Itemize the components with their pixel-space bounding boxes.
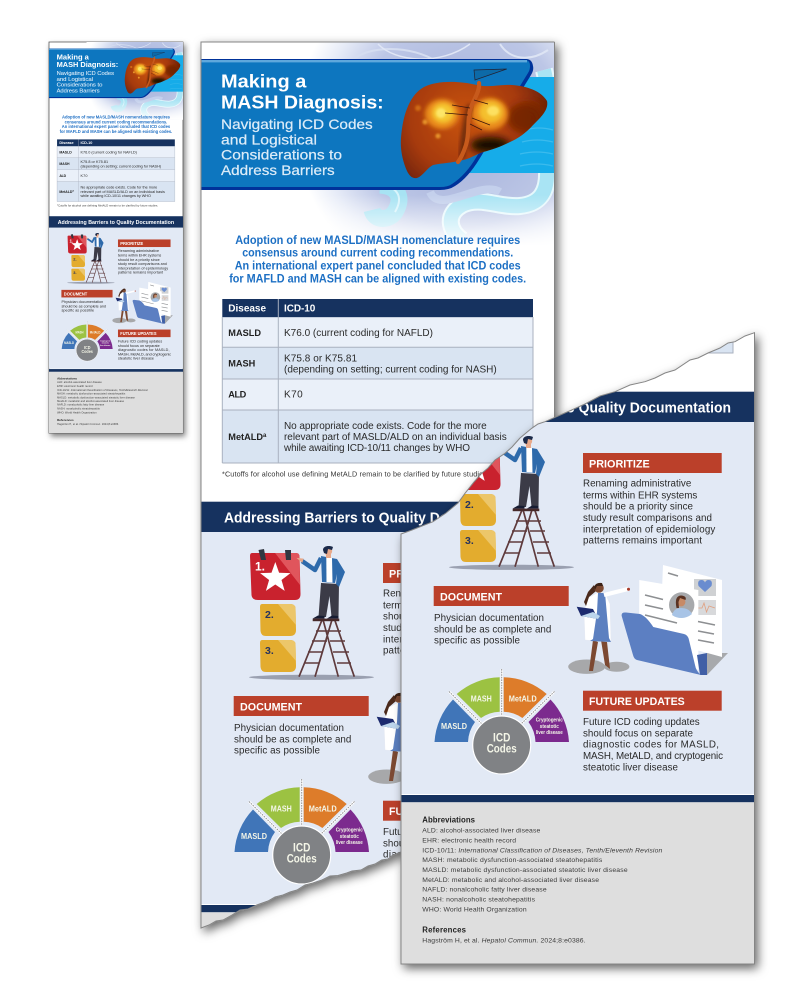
thumbnail infographic: MASLD	[59, 150, 72, 154]
thumbnail infographic: NAFLD: nonalcoholic fatty liver disease	[57, 403, 105, 407]
abbreviations: MetALD: metabolic and alcohol-associated liver disease	[422, 877, 599, 884]
chart: ICD codes wheel: Codes	[487, 744, 517, 756]
chart: ICD codes wheel: Cryptogenic	[336, 828, 363, 834]
thumbnail infographic: study result comparisons and	[118, 262, 167, 266]
thumbnail infographic: ICD	[84, 345, 90, 350]
thumbnail infographic: (depending on setting; current coding for NASH)	[80, 164, 162, 168]
block: document: DOCUMENT	[440, 592, 502, 604]
illustration: doctor and patient folder	[568, 565, 728, 675]
thumbnail infographic: Cryptogenic	[100, 339, 111, 342]
chart: ICD codes wheel: ICD	[293, 843, 310, 855]
thumbnail infographic: Making a	[57, 54, 89, 61]
thumbnail infographic: Renaming administrative	[118, 249, 159, 253]
block: prioritize: patterns remains important	[383, 645, 502, 656]
thumbnail infographic: MASLD: metabolic dysfunction-associated steatotic liver disease	[57, 395, 135, 399]
thumbnail infographic: steatotic liver disease	[118, 357, 154, 361]
block: document: Physician documentation	[434, 613, 544, 624]
block: prioritize: PRIORITIZE	[389, 568, 450, 580]
chart: ICD codes wheel: MASH	[471, 693, 492, 703]
block: future updates	[583, 691, 723, 773]
block: document: Physician documentation	[234, 723, 344, 734]
block: prioritize: Renaming administrative	[583, 479, 692, 490]
thumbnail infographic: MASH	[75, 331, 84, 335]
chart: ICD codes wheel: MetALD	[509, 693, 537, 703]
thumbnail infographic: should focus on separate	[118, 344, 160, 348]
block: prioritize: should be a priority since	[583, 501, 694, 512]
block: future updates: steatotic liver disease	[583, 762, 679, 773]
thumbnail infographic: interpretation of epidemiology	[118, 267, 168, 271]
abbreviations: MASH: metabolic dysfunction-associated steatohepatitis	[422, 857, 603, 864]
chart: ICD codes wheel: Cryptogenic	[536, 718, 563, 724]
section heading band: Addressing Barriers to Quality Documentation	[224, 509, 531, 526]
table: ICD-10 codes: K76.0 (current coding for NAFLD)	[284, 328, 433, 339]
block: future updates: diagnostic codes for MASLD,	[383, 850, 519, 861]
intro text: for MAFLD and MASH can be aligned with existing codes.	[229, 271, 526, 285]
thumbnail infographic: 1.	[69, 238, 73, 243]
block: future updates: should focus on separate	[583, 728, 694, 739]
abbreviations: ICD-10/11: International Classification of Diseases, Tenth/Eleventh Revision	[422, 847, 663, 854]
table footnote: *Cutoffs for alcohol use defining MetALD remain to be clarified by future studies.	[222, 470, 489, 479]
abbreviations: Abbreviations	[422, 816, 476, 825]
illustration: doctor and folder	[368, 692, 400, 784]
thumbnail infographic: K75.8 or K75.81	[80, 160, 108, 164]
illustration: man on ladder with priority list: 2.	[465, 499, 474, 511]
block: document: DOCUMENT	[240, 702, 302, 714]
title: Navigating ICD Codes	[221, 117, 373, 132]
thumbnail infographic: DOCUMENT	[64, 291, 88, 296]
references: References	[422, 925, 467, 934]
illustration: priority list, man on ladder	[249, 546, 374, 680]
table: ICD-10 codes: No appropriate code exists. Code for the more	[284, 421, 487, 432]
thumbnail infographic: No appropriate code exists. Code for the more	[80, 186, 157, 190]
thumbnail infographic: Adoption of new MASLD/MASH nomenclature requires	[62, 115, 170, 120]
thumbnail infographic: relevant part of MASLD/ALD on an individual basis	[80, 190, 165, 194]
illustration: priority list, man on ladder: 1.	[255, 560, 265, 574]
block: prioritize: study result comparisons and	[583, 513, 712, 524]
abbreviations	[422, 816, 663, 914]
block: prioritize: study result comparisons and	[383, 623, 512, 634]
thumbnail infographic: Navigating ICD Codes	[57, 71, 114, 77]
thumbnail infographic: 2.	[73, 256, 77, 261]
block: document	[434, 586, 569, 647]
thumbnail infographic: MASH: metabolic dysfunction-associated steatohepatitis	[57, 391, 126, 395]
block: document: specific as possible	[434, 636, 521, 647]
thumbnail infographic: should be a priority since	[118, 258, 160, 262]
thumbnail infographic: Addressing Barriers to Quality Documentation	[58, 220, 175, 226]
title: Address Barriers	[221, 163, 335, 178]
thumbnail infographic: ALD	[59, 174, 67, 178]
block: future updates: Future ICD coding updates	[383, 827, 500, 838]
illustration: man on ladder with priority list: 3.	[465, 535, 474, 547]
table: ICD-10 codes: MASH	[228, 359, 256, 369]
section heading band, torn	[546, 392, 754, 422]
panel: enlarged infographic top sheet	[201, 42, 555, 942]
table: ICD-10 codes: (depending on setting; current coding for NASH)	[284, 365, 497, 376]
chart: ICD codes wheel: steatotic	[340, 834, 359, 840]
abbreviations: ALD: alcohol-associated liver disease	[422, 827, 541, 834]
thumbnail infographic: *Cutoffs for alcohol use defining MetALD remain to be clarified by future studies.	[57, 204, 158, 208]
thumbnail infographic	[49, 42, 183, 433]
block: future updates: Future ICD coding updates	[583, 717, 700, 728]
panel: enlarged infographic bottom sheet	[401, 330, 754, 966]
table: ICD-10 codes: Disease	[228, 304, 266, 315]
abbreviations: NASH: nonalcoholic steatohepatitis	[422, 897, 536, 904]
block: prioritize: terms within EHR systems	[383, 600, 497, 611]
block: future updates: FUTURE UPDATES	[589, 696, 685, 708]
thumbnail infographic: should be as complete and	[62, 304, 106, 308]
thumbnail infographic: EHR: electronic health record	[57, 384, 93, 388]
thumbnail infographic: MASH	[59, 162, 70, 166]
thumbnail infographic: steatotic	[102, 342, 110, 345]
intro text	[229, 233, 526, 285]
thumbnail infographic: K70	[80, 174, 88, 178]
thumbnail infographic: specific as possible	[62, 309, 94, 313]
illustration: priority list, man on ladder: 3.	[265, 645, 274, 657]
block: prioritize: Renaming administrative	[383, 589, 492, 600]
abbreviations: WHO: World Health Organization	[422, 907, 527, 914]
thumbnail infographic: Future ICD coding updates	[118, 340, 162, 344]
thumbnail infographic: Disease	[59, 141, 74, 145]
thumbnail infographic: FUTURE UPDATES	[120, 331, 157, 336]
title: Considerations to	[221, 148, 342, 162]
chart: ICD codes wheel: MASLD	[441, 721, 467, 731]
chart: ICD codes wheel: MetALD	[309, 803, 337, 813]
thumbnail infographic: MetALD	[59, 190, 72, 194]
block: future updates: FUTURE UPDATES	[389, 806, 485, 818]
intro text: An international expert panel concluded that ICD codes	[235, 258, 521, 272]
thumbnail infographic: WHO: World Health Organization	[57, 410, 97, 414]
block: prioritize: interpretation of epidemiology	[383, 634, 515, 645]
thumbnail infographic: terms within EHR systems	[118, 254, 161, 258]
chart: ICD codes wheel: liver disease	[536, 730, 563, 736]
header banner with liver	[201, 42, 555, 247]
chart: ICD codes wheel: ICD	[493, 733, 510, 745]
thumbnail infographic: liver disease	[100, 345, 111, 347]
thumbnail infographic: MASLD	[64, 341, 75, 345]
block: prioritize	[383, 563, 400, 656]
table: ICD-10 codes: MetALD	[228, 432, 263, 442]
thumbnail infographic: for MAFLD and MASH can be aligned with existing codes.	[60, 129, 172, 134]
thumbnail infographic: Physician documentation	[62, 300, 103, 304]
thumbnail infographic: a	[72, 191, 74, 193]
block: future updates	[383, 800, 400, 858]
abbreviations: NAFLD: nonalcoholic fatty liver disease	[422, 887, 547, 894]
thumbnail infographic: PRIORITIZE	[120, 241, 143, 246]
thumbnail infographic: An international expert panel concluded that ICD codes	[62, 124, 171, 129]
block: document: should be as complete and	[234, 734, 351, 745]
references: Hagström H, et al. Hepatol Commun. 2024;8:e0386.	[422, 937, 586, 944]
table: ICD-10 codes: MASLD	[228, 328, 261, 338]
thumbnail infographic: Hagström H, et al. Hepatol Commun. 2024;8:e0386.	[57, 422, 119, 426]
thumbnail infographic: diagnostic codes for MASLD,	[118, 348, 170, 352]
thumbnail infographic: Abbreviations	[57, 377, 77, 381]
block: future updates: should focus on separate	[383, 838, 494, 849]
block: future updates: MASH, MetALD, and cryptogenic	[583, 751, 723, 762]
references	[422, 925, 586, 944]
thumbnail infographic: MetALD: metabolic and alcohol-associated liver disease	[57, 399, 125, 403]
abbreviations: EHR: electronic health record	[422, 837, 516, 844]
thumbnail infographic: while awaiting ICD-10/11 changes by WHO	[80, 194, 151, 198]
table: ICD-10 codes: relevant part of MASLD/ALD on an individual basis	[284, 432, 507, 443]
table: ICD-10 codes	[222, 299, 533, 463]
block: document: should be as complete and	[434, 624, 551, 635]
chart: ICD codes wheel: liver disease	[336, 840, 363, 846]
table: ICD-10 codes: while awaiting ICD-10/11 changes by WHO	[283, 443, 470, 454]
intro text: consensus around current coding recommendations.	[242, 246, 513, 260]
thumbnail infographic: 3.	[73, 270, 77, 275]
chart: ICD codes wheel	[234, 779, 369, 884]
title: and Logistical	[221, 132, 317, 148]
section heading band, torn: Addressing Barriers to Quality Documentation	[424, 399, 731, 416]
table: ICD-10 codes: ICD-10	[284, 304, 316, 315]
thumbnail infographic: ICD-10	[80, 141, 92, 145]
intro text: Adoption of new MASLD/MASH nomenclature requires	[235, 233, 521, 247]
thumbnail infographic: K76.0 (current coding for NAFLD)	[80, 150, 138, 154]
block: future updates: diagnostic codes for MASLD,	[583, 740, 719, 751]
title: MASH Diagnosis:	[221, 91, 384, 112]
thumbnail infographic: ICD-10/11: International Classification of Diseases, Tenth/Eleventh Revision	[57, 388, 149, 392]
section heading band	[202, 502, 458, 532]
thumbnail infographic: MASH, MetALD, and cryptogenic	[118, 352, 171, 356]
illustration: man on ladder with priority list	[449, 436, 574, 570]
thumbnail infographic: patterns remains important	[118, 271, 163, 275]
thumbnail infographic: MASH Diagnosis:	[57, 62, 118, 69]
title: Making a	[221, 71, 307, 92]
chart: ICD codes wheel: steatotic	[540, 724, 559, 730]
thumbnail infographic: ALD: alcohol-associated liver disease	[57, 380, 102, 384]
block: prioritize	[583, 453, 722, 546]
chart: ICD codes wheel: MASLD	[241, 831, 267, 841]
block: prioritize: interpretation of epidemiology	[583, 524, 715, 535]
table: ICD-10 codes: K75.8 or K75.81	[284, 354, 357, 365]
block: prioritize: should be a priority since	[383, 611, 494, 622]
thumbnail infographic: Address Barriers	[57, 88, 100, 94]
table: ICD-10 codes: a	[263, 433, 267, 439]
chart: ICD codes wheel: Codes	[287, 854, 317, 866]
abbreviations: MASLD: metabolic dysfunction-associated steatotic liver disease	[422, 867, 628, 874]
thumbnail infographic: NASH: nonalcoholic steatohepatitis	[57, 407, 101, 411]
thumbnail infographic: Codes	[81, 349, 93, 354]
table: ICD-10 codes: ALD	[228, 390, 247, 400]
chart: ICD codes wheel: MASH	[271, 803, 292, 813]
chart: ICD codes wheel	[434, 669, 569, 774]
illustration: priority list, man on ladder: 2.	[265, 609, 274, 621]
thumbnail infographic: Considerations to	[57, 83, 103, 89]
thumbnail infographic: and Logistical	[57, 77, 93, 83]
block: document	[234, 696, 369, 757]
thumbnail infographic: References	[57, 418, 74, 422]
table: ICD-10 codes: K70	[284, 390, 303, 401]
title	[221, 71, 384, 178]
block: prioritize: terms within EHR systems	[583, 490, 697, 501]
thumbnail infographic: MetALD	[90, 331, 101, 335]
thumbnail infographic: consensus around current coding recommendations.	[65, 119, 167, 124]
block: prioritize: patterns remains important	[583, 535, 702, 546]
block: prioritize: PRIORITIZE	[589, 458, 650, 470]
block: document: specific as possible	[234, 746, 321, 757]
